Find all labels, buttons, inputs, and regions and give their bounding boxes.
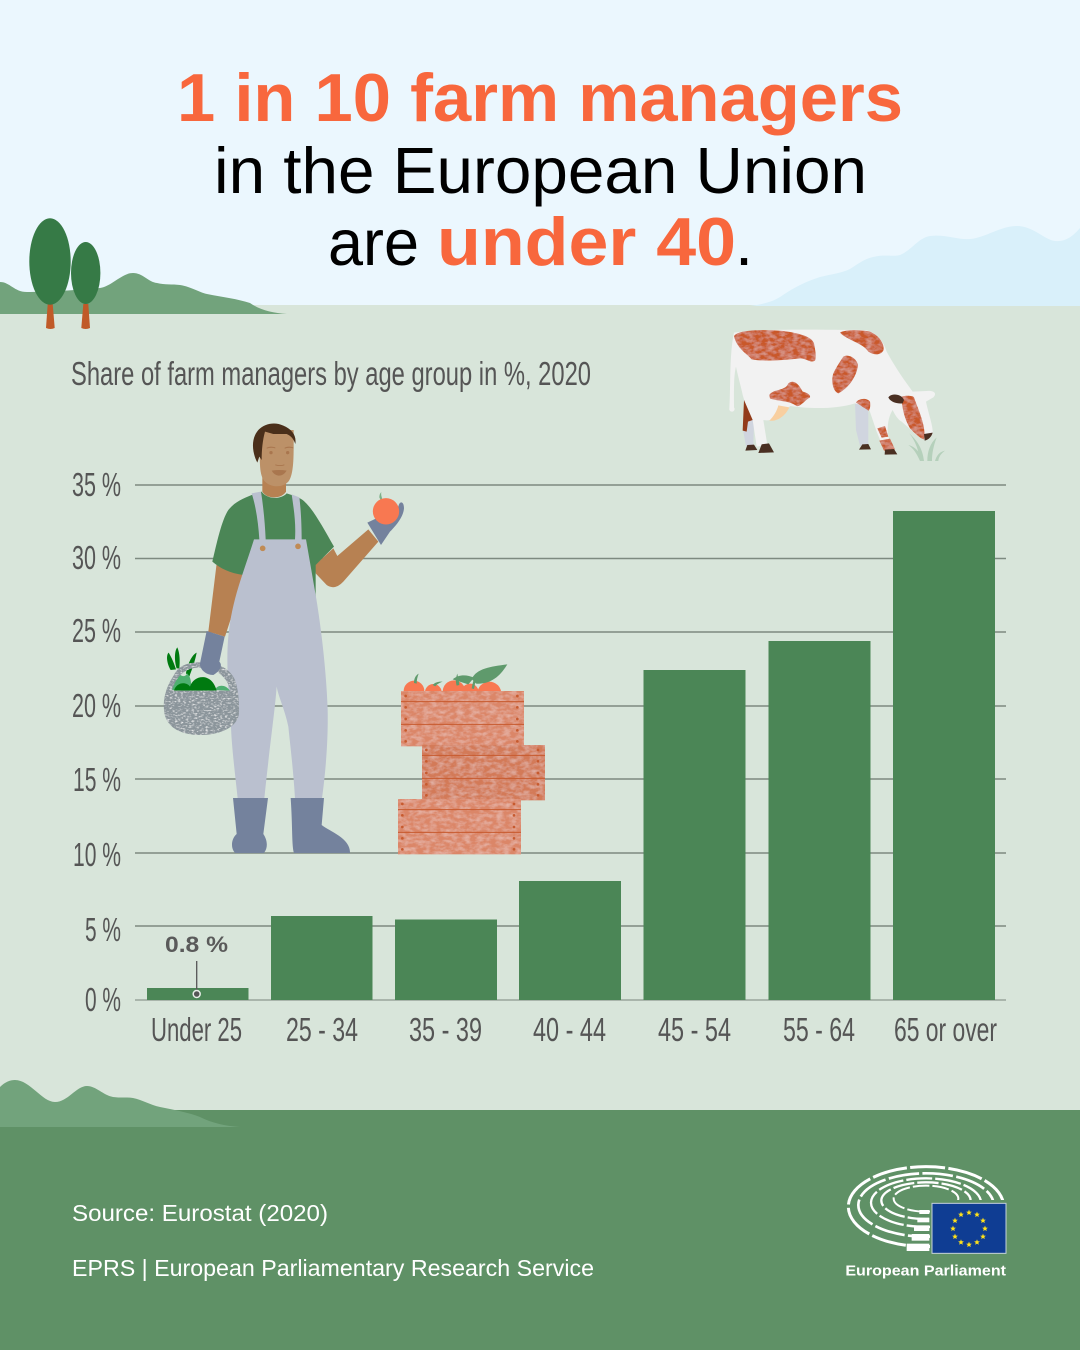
illustration: cow bbox=[729, 330, 945, 461]
y axis labels: 25 % bbox=[72, 612, 121, 649]
cow: rump shade bbox=[743, 400, 753, 432]
trees bbox=[29, 218, 100, 329]
illustration: crates of fruit bbox=[398, 664, 545, 854]
title: . bbox=[735, 206, 753, 279]
farmer: boots bbox=[232, 798, 350, 853]
background: sky bbox=[0, 0, 1080, 306]
farmer: facial features bbox=[267, 447, 293, 476]
y axis labels: 10 % bbox=[73, 836, 121, 873]
y axis labels: 5 % bbox=[85, 911, 121, 948]
logo: European Parliament bbox=[845, 1167, 1006, 1279]
x axis labels: 55 - 64 bbox=[783, 1011, 855, 1048]
logo: hemicycle bbox=[848, 1167, 1004, 1247]
x axis labels: 65 or over bbox=[894, 1011, 997, 1048]
crate: middle bbox=[422, 745, 545, 800]
footer left hill bbox=[0, 1080, 240, 1127]
logo: wordmark: European Parliament bbox=[845, 1262, 1006, 1279]
farmer: neck bbox=[262, 475, 286, 497]
distant blue hills bbox=[750, 226, 1080, 306]
y axis labels: 35 % bbox=[72, 466, 121, 503]
logo: EU flag bbox=[932, 1203, 1006, 1253]
x axis labels: 25 - 34 bbox=[286, 1011, 358, 1048]
cow: udder bbox=[769, 405, 789, 421]
title: in the European Union bbox=[214, 134, 867, 207]
callout: under 25 value bbox=[165, 932, 228, 998]
title bbox=[177, 60, 903, 280]
logo: bottom seats bbox=[907, 1210, 929, 1251]
cow: grass bbox=[908, 433, 945, 461]
x axis labels: 40 - 44 bbox=[533, 1011, 606, 1048]
farmer: gloves bbox=[200, 502, 404, 675]
farmer: arms bbox=[208, 529, 378, 637]
background: footer band bbox=[0, 1110, 1080, 1350]
cow: body bbox=[729, 330, 935, 452]
farmer: hair bbox=[253, 424, 296, 463]
y axis labels: 0 % bbox=[85, 981, 121, 1018]
farmer: basket bbox=[164, 662, 239, 735]
x axis labels: Under 25 bbox=[151, 1011, 242, 1048]
farmer: shirt bbox=[212, 492, 334, 597]
illustration: farmer bbox=[164, 424, 404, 853]
crates: fruit bbox=[404, 680, 501, 691]
crate: bottom bbox=[398, 799, 521, 854]
cow: hooves bbox=[745, 443, 897, 455]
farmer: basket contents bbox=[167, 647, 230, 691]
farmer: face bbox=[260, 430, 294, 486]
cow: patches bbox=[734, 330, 925, 451]
cow: far legs bbox=[743, 403, 868, 446]
title: 1 in 10 farm managers bbox=[177, 60, 903, 136]
callout: under 25 value: 0.8 % bbox=[165, 932, 228, 957]
y axis labels: 30 % bbox=[72, 539, 121, 576]
farmer: overalls bbox=[227, 492, 328, 798]
farmer: overall buttons bbox=[260, 543, 301, 551]
y axis labels: 20 % bbox=[72, 687, 121, 724]
y axis labels: 15 % bbox=[73, 761, 121, 798]
chart subtitle: Share of farm managers by age group in %, 2020 bbox=[71, 355, 591, 392]
y axis labels bbox=[72, 466, 121, 1018]
bar chart bbox=[72, 466, 1006, 1048]
source text: Source: Eurostat (2020) bbox=[72, 1200, 328, 1226]
crates: leaves bbox=[414, 664, 507, 689]
farmer: apple bbox=[373, 492, 399, 524]
chart gridlines bbox=[135, 485, 1006, 1000]
left hill bbox=[0, 273, 287, 314]
title: are bbox=[328, 206, 419, 279]
background: field bbox=[0, 305, 1080, 1111]
publisher text: EPRS | European Parliamentary Research Service bbox=[72, 1255, 594, 1281]
bars bbox=[147, 511, 995, 1000]
x axis labels: 35 - 39 bbox=[409, 1011, 482, 1048]
x axis labels: 45 - 54 bbox=[658, 1011, 731, 1048]
title: under 40 bbox=[437, 204, 736, 280]
x axis labels bbox=[151, 1011, 997, 1048]
crate: top bbox=[401, 691, 524, 746]
cow: ear and muzzle bbox=[888, 395, 933, 441]
